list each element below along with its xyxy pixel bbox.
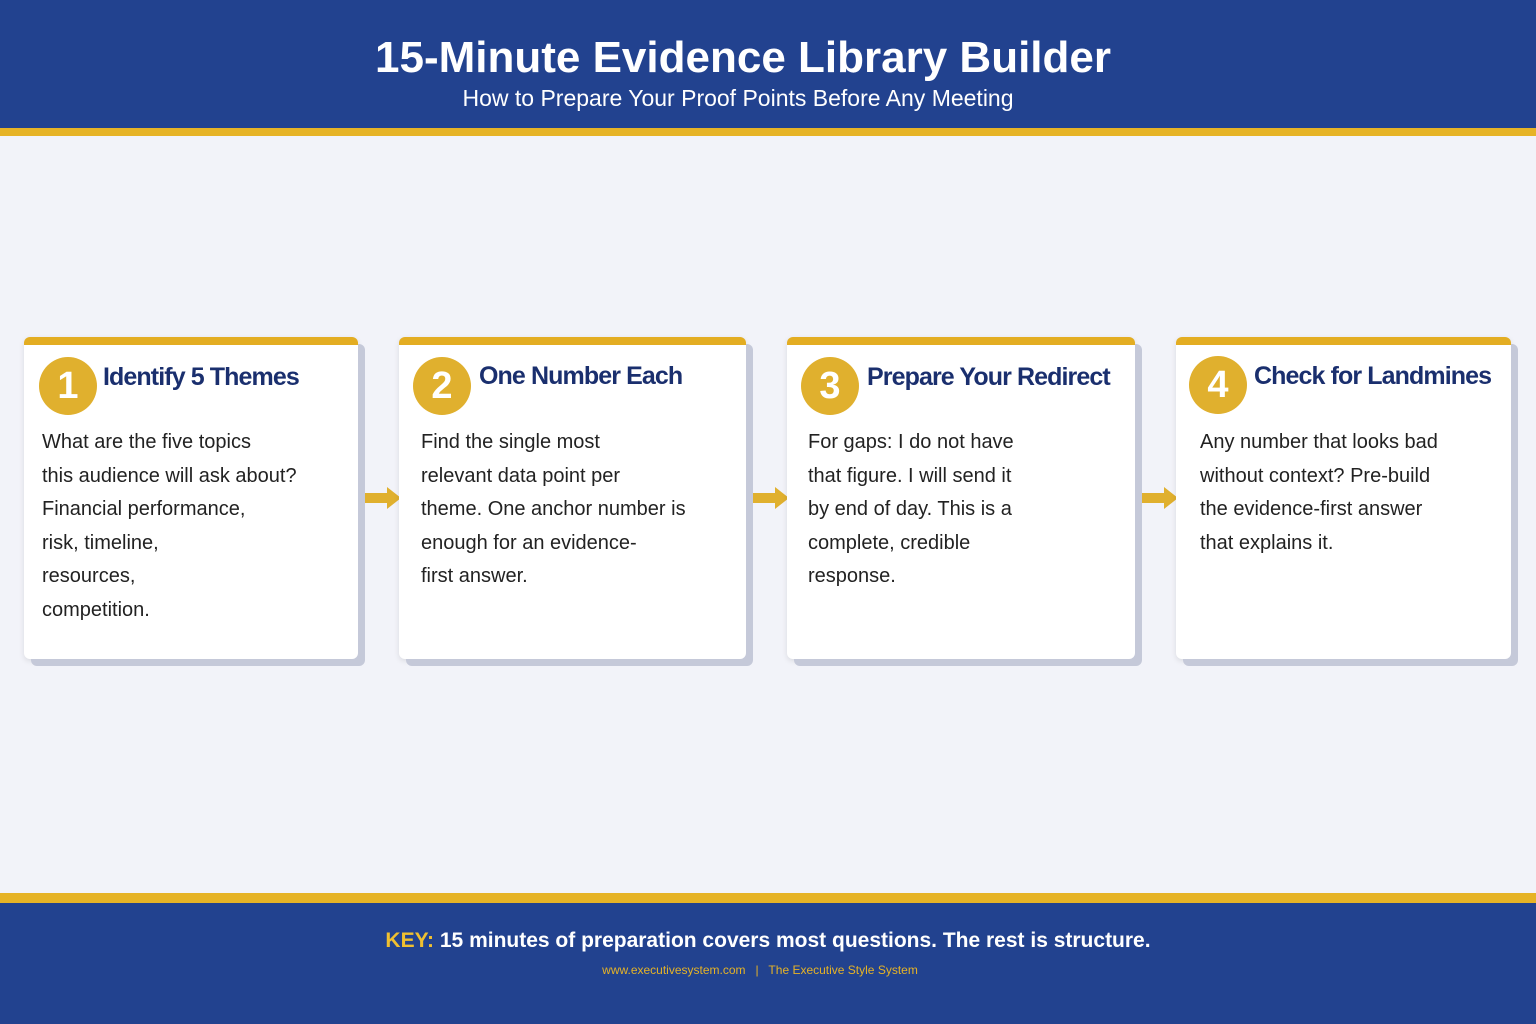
card 4 text bbox=[1200, 431, 1438, 554]
key message: KEY: 15 minutes of preparation covers most questions. The rest is structure. bbox=[385, 929, 1151, 952]
card 3 bbox=[787, 337, 1135, 659]
card 4 text: Any number that looks bad bbox=[1200, 431, 1438, 453]
card 3 text: For gaps: I do not have bbox=[808, 431, 1014, 453]
card 3 text: by end of day. This is a bbox=[808, 498, 1012, 520]
header bbox=[0, 0, 1536, 136]
card 4 bbox=[1176, 337, 1511, 659]
card 1 text: Financial performance, bbox=[42, 498, 245, 520]
footer credits: www.executivesystem.com | The Executive Style System bbox=[602, 963, 918, 977]
icon: number 4: 4 bbox=[1207, 364, 1229, 406]
arrow 3 bbox=[1142, 487, 1176, 509]
icon: number 4 bbox=[1189, 356, 1247, 414]
card 4 text: the evidence-first answer bbox=[1200, 498, 1422, 520]
title: 15-Minute Evidence Library Builder bbox=[375, 33, 1111, 82]
card 2 text: relevant data point per bbox=[421, 464, 620, 486]
card 3 title: Prepare Your Redirect bbox=[867, 363, 1110, 391]
card 1 text: risk, timeline, bbox=[42, 532, 159, 554]
card 4 title: Check for Landmines bbox=[1254, 362, 1491, 390]
arrow 1 bbox=[365, 487, 399, 509]
card 1 title: Identify 5 Themes bbox=[103, 363, 299, 391]
card 2 text: theme. One anchor number is bbox=[421, 498, 686, 520]
icon: number 2: 2 bbox=[431, 365, 453, 407]
icon: number 1: 1 bbox=[57, 365, 79, 407]
icon: number 2 bbox=[413, 357, 471, 415]
card 2 text: enough for an evidence- bbox=[421, 532, 637, 554]
card 1 text: competition. bbox=[42, 598, 150, 620]
card 1 text: this audience will ask about? bbox=[42, 464, 297, 486]
card 2 text: first answer. bbox=[421, 565, 528, 587]
card 2 text: Find the single most bbox=[421, 431, 600, 453]
card 4 text: that explains it. bbox=[1200, 532, 1333, 554]
card 1 text: resources, bbox=[42, 565, 135, 587]
card 2 text bbox=[421, 431, 686, 587]
card 2 title: One Number Each bbox=[479, 362, 682, 390]
card 1 text: What are the five topics bbox=[42, 431, 251, 453]
card 2 bbox=[399, 337, 746, 659]
footer bbox=[0, 893, 1536, 1024]
card 1 bbox=[24, 337, 358, 659]
arrow 2 bbox=[753, 487, 787, 509]
card 4 text: without context? Pre-build bbox=[1200, 464, 1430, 486]
icon: number 3: 3 bbox=[819, 365, 841, 407]
card 3 text: that figure. I will send it bbox=[808, 464, 1011, 486]
card 3 text: complete, credible bbox=[808, 532, 970, 554]
card 3 text bbox=[808, 431, 1014, 587]
card 3 text: response. bbox=[808, 565, 896, 587]
subtitle: How to Prepare Your Proof Points Before Any Meeting bbox=[462, 85, 1014, 111]
card 1 text bbox=[42, 431, 297, 620]
icon: number 1 bbox=[39, 357, 97, 415]
icon: number 3 bbox=[801, 357, 859, 415]
